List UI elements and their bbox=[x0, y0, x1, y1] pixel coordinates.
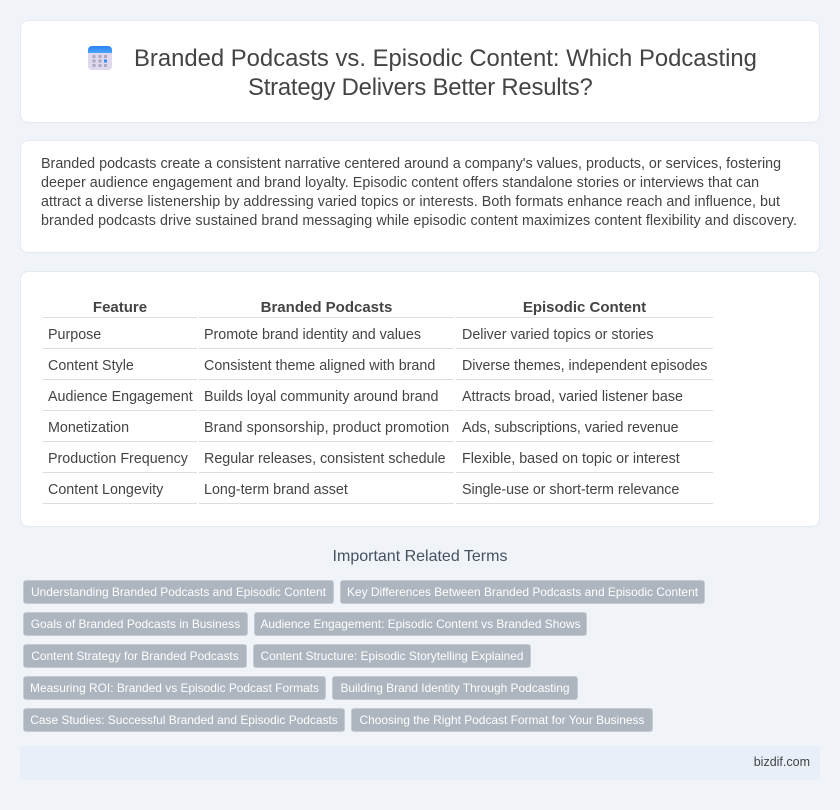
row: Purpose: Purpose bbox=[48, 327, 101, 343]
panel: comparison table card bbox=[20, 271, 820, 527]
comparison table: Single-use or short-term relevance bbox=[462, 482, 679, 498]
tag: Choosing the Right Podcast Format for Your Business bbox=[360, 713, 644, 727]
tag: Case Studies: Successful Branded and Episodic Podcasts bbox=[30, 713, 338, 727]
tag bbox=[340, 580, 705, 604]
tag bbox=[23, 708, 345, 732]
tag bbox=[332, 676, 578, 700]
icon: calendar bbox=[88, 46, 112, 70]
row: Content Style: Content Style bbox=[48, 358, 134, 374]
intro paragraph: Branded podcasts create a consistent narrative centered around a company's values, products, or services, fostering bbox=[41, 156, 781, 172]
tag: Goals of Branded Podcasts in Business bbox=[31, 617, 240, 631]
comparison table: Consistent theme aligned with brand bbox=[204, 358, 435, 374]
intro paragraph: branded podcasts drive sustained brand messaging while episodic content maximizes content flexibility and discovery. bbox=[41, 213, 797, 229]
panel: title card bbox=[20, 20, 820, 123]
tag bbox=[23, 676, 326, 700]
tag bbox=[253, 644, 531, 668]
tag: Understanding Branded Podcasts and Episodic Content bbox=[31, 585, 326, 599]
row: Content Longevity: Content Longevity bbox=[48, 482, 163, 498]
row: Audience Engagement: Audience Engagement bbox=[48, 389, 193, 405]
comparison table bbox=[43, 299, 713, 504]
title bbox=[134, 45, 757, 101]
comparison table: Long-term brand asset bbox=[204, 482, 348, 498]
footer bar bbox=[20, 746, 820, 780]
comparison table: Promote brand identity and values bbox=[204, 327, 421, 343]
intro paragraph: deeper audience engagement and brand loyalty. Episodic content offers standalone stories or interviews that can bbox=[41, 175, 759, 191]
tag bbox=[23, 612, 248, 636]
comparison table: Ads, subscriptions, varied revenue bbox=[462, 420, 678, 436]
title: Strategy Delivers Better Results? bbox=[248, 74, 593, 101]
tag bbox=[23, 644, 247, 668]
panel: intro card bbox=[20, 140, 820, 253]
heading: related terms: Important Related Terms bbox=[333, 548, 507, 565]
table header: Episodic Content: Episodic Content bbox=[523, 299, 646, 316]
intro paragraph: attract a diverse listenership by addressing varied topics or interests. Both formats enhance reach and influence, but bbox=[41, 194, 780, 210]
tag bbox=[23, 580, 334, 604]
title: Branded Podcasts vs. Episodic Content: Which Podcasting bbox=[134, 45, 757, 72]
comparison table: Deliver varied topics or stories bbox=[462, 327, 654, 343]
intro paragraph bbox=[41, 156, 797, 229]
tag: Content Structure: Episodic Storytelling Explained bbox=[260, 649, 524, 663]
tag: Measuring ROI: Branded vs Episodic Podcast Formats bbox=[30, 681, 319, 695]
related terms tags bbox=[23, 580, 705, 732]
table header: Feature: Feature bbox=[93, 299, 147, 316]
footer: site name: bizdif.com bbox=[754, 755, 810, 769]
tag bbox=[351, 708, 653, 732]
tag: Key Differences Between Branded Podcasts and Episodic Content bbox=[347, 585, 698, 599]
table header: Branded Podcasts: Branded Podcasts bbox=[261, 299, 392, 316]
comparison table: Flexible, based on topic or interest bbox=[462, 451, 680, 467]
tag: Audience Engagement: Episodic Content vs Branded Shows bbox=[260, 617, 581, 631]
tag bbox=[254, 612, 587, 636]
comparison table: Regular releases, consistent schedule bbox=[204, 451, 446, 467]
comparison table: Brand sponsorship, product promotion bbox=[204, 420, 449, 436]
tag: Building Brand Identity Through Podcasting bbox=[340, 681, 570, 695]
comparison table: Diverse themes, independent episodes bbox=[462, 358, 707, 374]
tag: Content Strategy for Branded Podcasts bbox=[31, 649, 239, 663]
comparison table: Builds loyal community around brand bbox=[204, 389, 438, 405]
row: Monetization: Monetization bbox=[48, 420, 129, 436]
row: Production Frequency: Production Frequency bbox=[48, 451, 188, 467]
comparison table: Attracts broad, varied listener base bbox=[462, 389, 683, 405]
